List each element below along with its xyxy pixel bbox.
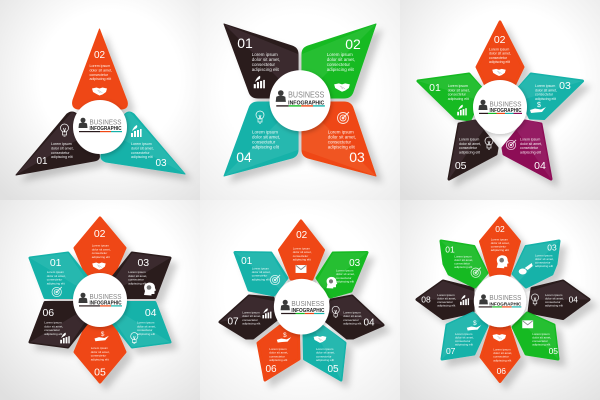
text block: dolor sit amet, (131, 146, 154, 150)
text block: dolor sit amet, (459, 142, 481, 146)
center circle with business infographic logo (73, 100, 127, 154)
center circle with business infographic logo: INFOGRAPHIC (490, 108, 522, 114)
number 02: 02 (345, 36, 361, 52)
icon: chart (457, 105, 467, 115)
text block: consectetur (51, 151, 70, 155)
petals with shadow (418, 22, 582, 179)
icon: bulb (256, 111, 264, 123)
text block: dolor sit amet, (252, 270, 271, 274)
petal 02 (477, 22, 523, 90)
petal 01 (16, 112, 100, 175)
icon: handshake (492, 69, 506, 76)
text block: adipiscing elit (131, 155, 153, 159)
text block: consectetur (520, 146, 539, 150)
icon: money (277, 332, 291, 342)
petals with shadow (16, 29, 185, 175)
number 01: 01 (241, 256, 253, 267)
text block: dolor sit amet, (242, 314, 261, 318)
text block: Lorem ipsum (269, 347, 287, 351)
number 03: 03 (547, 242, 557, 252)
text block: Lorem ipsum (535, 84, 555, 88)
petal 03 (302, 102, 376, 176)
petal 02 (280, 221, 324, 279)
text block: dolor sit amet, (44, 324, 63, 328)
text block: Lorem ipsum (489, 48, 509, 52)
icon: target (338, 112, 349, 124)
text block: consectetur (532, 339, 548, 343)
icon: money (94, 331, 109, 341)
icon: envelope (296, 266, 306, 272)
text block: Lorem ipsum (455, 332, 473, 336)
number 01: 01 (50, 257, 62, 269)
text block: consectetur (336, 276, 352, 280)
text block: Lorem ipsum (493, 348, 511, 352)
petal 07 (220, 296, 302, 338)
center circle with business infographic logo: BUSINESS (288, 90, 325, 100)
petal 02 (302, 24, 376, 98)
panel: six-step diagram (0, 200, 200, 400)
text block: adipiscing elit (47, 281, 65, 285)
text block: consectetur (252, 274, 267, 278)
number 04: 04 (534, 160, 546, 172)
icon: envelope (523, 321, 533, 328)
text block: Lorem ipsum (252, 130, 278, 134)
text block: dolor sit amet, (448, 88, 470, 92)
text block: Lorem ipsum (545, 293, 563, 297)
petal 01 (441, 241, 500, 300)
text block: Lorem ipsum (336, 268, 354, 272)
text block: dolor sit amet, (489, 52, 511, 56)
text block: Lorem ipsum (137, 320, 155, 324)
icon: money (467, 320, 481, 330)
number 04: 04 (363, 318, 375, 328)
icon: chart (60, 333, 70, 343)
center circle with business infographic logo: INFOGRAPHIC (90, 300, 122, 306)
petal 04 (500, 107, 551, 179)
text block: dolor sit amet, (532, 336, 551, 340)
icon: chart (460, 295, 469, 305)
petal 02 (73, 29, 127, 109)
petal 01 (418, 74, 500, 120)
text block: consectetur (454, 262, 470, 266)
petal 01 (224, 24, 298, 98)
petal 06 (481, 326, 519, 382)
number 06: 06 (497, 366, 506, 376)
text block: consectetur (448, 93, 467, 97)
center circle with business infographic logo (73, 273, 127, 327)
number 02: 02 (296, 230, 308, 241)
text block: Lorem ipsum (131, 142, 152, 146)
number 06: 06 (265, 364, 277, 375)
number 03: 03 (559, 80, 571, 92)
petal 02 (480, 218, 520, 276)
text block: dolor sit amet, (454, 258, 473, 262)
text block: dolor sit amet, (343, 314, 362, 318)
text block: consectetur (459, 146, 478, 150)
petal 01 (235, 252, 302, 307)
petal 03 (100, 112, 185, 174)
text block: adipiscing elit (493, 358, 511, 362)
panel: three-step diagram (0, 0, 200, 200)
text block: consectetur (455, 339, 471, 343)
text block: adipiscing elit (448, 97, 469, 101)
text block: dolor sit amet, (269, 351, 288, 355)
text block: Lorem ipsum (128, 270, 146, 274)
text block: Lorem ipsum (91, 346, 109, 350)
text block: adipiscing elit (137, 332, 155, 336)
petals with shadow (417, 218, 589, 382)
number 05: 05 (549, 346, 558, 356)
text block: dolor sit amet, (91, 350, 110, 354)
text block: adipiscing elit (532, 342, 550, 346)
text block: dolor sit amet, (92, 247, 111, 251)
text block: dolor sit amet, (455, 336, 474, 340)
text block: adipiscing elit (51, 155, 73, 159)
text block: consectetur (493, 355, 509, 359)
petal 05 (500, 300, 558, 359)
icon: handshake (334, 83, 350, 92)
petal 04 (224, 102, 298, 176)
text block: consectetur (91, 354, 106, 358)
text block: Lorem ipsum (454, 254, 472, 258)
icon: piggy bank (519, 263, 533, 274)
number 02: 02 (94, 50, 105, 61)
text block: dolor sit amet, (47, 274, 66, 278)
text block: dolor sit amet, (316, 351, 335, 355)
text block: Lorem ipsum (47, 270, 65, 274)
text block: Lorem ipsum (328, 130, 354, 134)
center circle with business infographic logo: INFOGRAPHIC (90, 126, 122, 132)
text block: consectetur (316, 354, 332, 358)
text block: adipiscing elit (269, 358, 287, 362)
text block: Lorem ipsum (92, 244, 110, 248)
text block: consectetur (545, 300, 561, 304)
text block: dolor sit amet, (437, 296, 456, 300)
text block: dolor sit amet, (535, 88, 557, 92)
text block: dolor sit amet, (328, 134, 356, 140)
text block: consectetur (269, 354, 285, 358)
number 05: 05 (455, 160, 467, 172)
number 03: 03 (155, 158, 167, 169)
number 03: 03 (349, 258, 361, 269)
text block: consectetur (47, 278, 62, 282)
number 07: 07 (227, 316, 239, 328)
center circle with business infographic logo: BUSINESS (90, 117, 122, 126)
text block: Lorem ipsum (51, 142, 72, 146)
icon: bulb (531, 294, 539, 305)
text block: consectetur (128, 278, 144, 282)
icon: bulb (131, 333, 138, 344)
text block: dolor sit amet, (293, 250, 312, 254)
text block: consectetur (131, 151, 150, 155)
petal 05 (302, 307, 345, 380)
number 01: 01 (429, 82, 441, 94)
text block: consectetur (44, 328, 60, 332)
text block: consectetur (327, 62, 350, 67)
text block: dolor sit amet, (545, 296, 564, 300)
text block: adipiscing elit (90, 77, 111, 81)
text block: dolor sit amet, (491, 241, 510, 245)
petal 01 (30, 253, 100, 300)
text block: dolor sit amet, (493, 351, 512, 355)
text block: Lorem ipsum (491, 238, 509, 242)
petal 04 (302, 296, 383, 338)
center circle with business infographic logo: BUSINESS (490, 100, 522, 108)
text block: consectetur (90, 73, 109, 77)
text block: Lorem ipsum (535, 254, 553, 258)
text block: Lorem ipsum (252, 52, 278, 57)
text block: adipiscing elit (252, 144, 280, 150)
text block: adipiscing elit (128, 281, 146, 285)
icon: target (471, 268, 481, 277)
text block: adipiscing elit (454, 265, 472, 269)
text block: adipiscing elit (336, 280, 354, 284)
text block: dolor sit amet, (327, 57, 355, 62)
number 02: 02 (494, 34, 506, 46)
text block: adipiscing elit (535, 97, 556, 101)
icon: bulb (60, 124, 68, 136)
petal 06 (30, 300, 100, 347)
panel: eight-step diagram (400, 200, 600, 400)
petals with shadow (30, 218, 170, 382)
icon: money (530, 102, 546, 113)
text block: adipiscing elit (459, 150, 480, 154)
text block: Lorem ipsum (90, 64, 110, 68)
text block: adipiscing elit (437, 304, 455, 308)
number 01: 01 (445, 244, 455, 254)
center circle with business infographic logo (474, 275, 526, 327)
number 01: 01 (237, 35, 253, 51)
petals with shadow (224, 24, 376, 176)
number 03: 03 (349, 149, 365, 165)
center circle with business infographic logo: BUSINESS (90, 292, 122, 301)
petal 05 (449, 107, 500, 179)
text block: dolor sit amet, (336, 272, 355, 276)
text block: dolor sit amet, (128, 274, 147, 278)
text block: Lorem ipsum (437, 293, 455, 297)
text block: Lorem ipsum (448, 84, 468, 88)
text block: consectetur (328, 140, 351, 144)
icon: bulb (332, 306, 339, 317)
center circle with business infographic logo (473, 80, 527, 134)
text block: consectetur (252, 62, 275, 67)
number 02: 02 (495, 224, 505, 234)
center circle with business infographic logo (269, 70, 331, 131)
text block: Lorem ipsum (532, 332, 550, 336)
text block: consectetur (535, 260, 551, 264)
text block: consectetur (489, 56, 508, 60)
text block: adipiscing elit (328, 144, 355, 150)
text block: Lorem ipsum (242, 310, 260, 314)
icon: handshake (92, 263, 106, 270)
text block: adipiscing elit (455, 342, 473, 346)
petal 03 (302, 252, 367, 307)
number 04: 04 (145, 307, 157, 319)
icon: handshake (314, 336, 326, 343)
text block: adipiscing elit (520, 150, 541, 154)
text block: Lorem ipsum (343, 310, 361, 314)
text block: adipiscing elit (293, 258, 311, 262)
number 03: 03 (137, 257, 149, 269)
icon: head (497, 255, 509, 268)
icon: bulb (485, 137, 493, 149)
text block: dolor sit amet, (137, 324, 156, 328)
text block: adipiscing elit (327, 67, 354, 72)
center circle with business infographic logo: INFOGRAPHIC (291, 308, 325, 314)
icon: handshake (92, 88, 107, 96)
center circle with business infographic logo: INFOGRAPHIC (489, 301, 522, 307)
text block: consectetur (535, 93, 554, 97)
text block: consectetur (491, 244, 506, 248)
petal 02 (75, 218, 125, 276)
icon: target (506, 140, 516, 150)
text block: consectetur (252, 140, 276, 144)
icon: head (144, 282, 156, 296)
number 05: 05 (327, 364, 339, 375)
text block: adipiscing elit (91, 357, 109, 361)
number 05: 05 (94, 366, 106, 378)
center circle with business infographic logo: INFOGRAPHIC (288, 100, 324, 106)
number 01: 01 (36, 156, 48, 167)
icon: chart (131, 125, 142, 137)
text block: dolor sit amet, (520, 142, 542, 146)
text block: adipiscing elit (545, 304, 563, 308)
icon: handshake (493, 334, 506, 341)
text block: consectetur (437, 300, 453, 304)
text block: Lorem ipsum (252, 266, 270, 270)
center circle with business infographic logo: BUSINESS (489, 293, 521, 302)
icon: chart (262, 308, 271, 318)
petal 03 (100, 253, 170, 300)
petal 07 (442, 300, 500, 359)
panel: four-step diagram (200, 0, 400, 200)
text block: adipiscing elit (252, 67, 279, 72)
text block: consectetur (343, 318, 359, 322)
number 08: 08 (421, 294, 431, 304)
text block: dolor sit amet, (535, 257, 554, 261)
text block: consectetur (242, 318, 258, 322)
panel: seven-step diagram (200, 200, 400, 400)
text block: consectetur (92, 251, 107, 255)
text block: adipiscing elit (242, 322, 260, 326)
text block: Lorem ipsum (44, 320, 62, 324)
text block: Lorem ipsum (293, 246, 311, 250)
text block: consectetur (137, 328, 153, 332)
panel: five-step diagram (400, 0, 600, 200)
petal 06 (258, 326, 299, 380)
number 04: 04 (236, 149, 252, 165)
text block: adipiscing elit (92, 255, 110, 259)
text block: dolor sit amet, (252, 57, 280, 62)
text block: consectetur (293, 254, 308, 258)
center circle with business infographic logo: BUSINESS (291, 299, 324, 308)
center circle with business infographic logo (274, 279, 330, 335)
text block: adipiscing elit (343, 322, 361, 326)
text block: dolor sit amet, (90, 68, 112, 72)
text block: dolor sit amet, (51, 146, 74, 150)
text block: dolor sit amet, (252, 134, 280, 140)
text block: adipiscing elit (489, 60, 510, 64)
text block: Lorem ipsum (520, 138, 540, 142)
icon: target (270, 275, 280, 285)
petal 03 (500, 241, 559, 300)
petal 04 (500, 281, 589, 318)
text block: Lorem ipsum (459, 138, 479, 142)
petals with shadow (220, 221, 383, 380)
text block: adipiscing elit (44, 332, 62, 336)
icon: chart (254, 76, 265, 88)
text block: adipiscing elit (252, 277, 270, 281)
text block: Lorem ipsum (327, 52, 353, 57)
icon: target (52, 287, 62, 297)
petal 04 (100, 300, 170, 347)
number 06: 06 (42, 307, 54, 319)
text block: Lorem ipsum (316, 347, 334, 351)
number 04: 04 (569, 294, 578, 304)
text block: adipiscing elit (316, 358, 334, 362)
petal 05 (75, 324, 125, 382)
number 02: 02 (94, 228, 106, 240)
text block: adipiscing elit (535, 264, 553, 268)
icon: head (326, 277, 337, 289)
petal 03 (500, 74, 582, 118)
number 07: 07 (446, 346, 456, 356)
text block: adipiscing elit (491, 248, 509, 252)
petal 08 (417, 281, 500, 318)
